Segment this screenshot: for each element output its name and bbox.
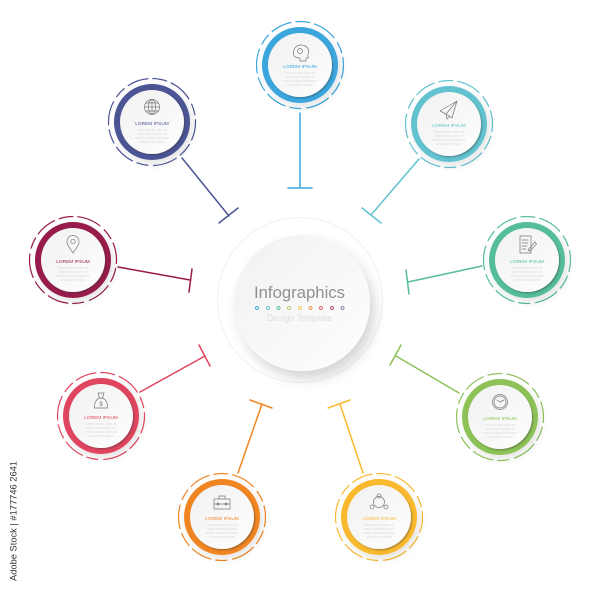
node: navy: [108, 78, 196, 166]
body text: Lorem ipsum dolor sit: [86, 422, 116, 426]
label: LOREM IPSUM: [135, 121, 169, 127]
icon: people cycle: [370, 494, 388, 509]
connector: red: [140, 345, 210, 392]
node: red: [58, 372, 144, 460]
body text: sed do eiusmod tempor: [362, 531, 397, 535]
node: sea green: [484, 216, 570, 304]
body text: amet consectetur elit: [86, 426, 116, 430]
connector: sea green: [406, 266, 482, 294]
body text: Lorem ipsum dolor sit: [285, 71, 315, 75]
body text: [205, 523, 240, 539]
body text: ut labore et dolore: [366, 535, 392, 539]
body text: sed do eiusmod tempor: [56, 274, 91, 278]
node: orange: [178, 474, 266, 560]
body text: [483, 423, 518, 439]
icon: paper plane: [440, 101, 457, 119]
label: LOREM IPSUM: [283, 64, 317, 70]
body text: amet consectetur elit: [58, 270, 88, 274]
hub subtitle: Design Template: [267, 313, 332, 323]
label: LOREM IPSUM: [205, 516, 239, 522]
body text: Lorem ipsum dolor sit: [364, 523, 394, 527]
hub title: Infographics: [254, 283, 345, 302]
hub colour dots: [256, 306, 344, 310]
node: crimson: [30, 216, 116, 304]
node: teal: [406, 80, 492, 168]
body text: amet consectetur elit: [434, 134, 464, 138]
body text: ut labore et dolore: [209, 535, 235, 539]
body text: Lorem ipsum dolor sit: [434, 130, 464, 134]
icon: globe: [144, 100, 160, 114]
body text: Lorem ipsum dolor sit: [512, 266, 542, 270]
body text: ut labore et dolore: [436, 142, 462, 146]
body text: Lorem ipsum dolor sit: [137, 128, 167, 132]
connector: orange: [238, 400, 272, 473]
connector: crimson: [118, 267, 192, 292]
icon: document and pen: [520, 236, 536, 253]
icon: head: [293, 45, 309, 61]
body text: sed do eiusmod tempor: [283, 79, 318, 83]
label: LOREM IPSUM: [510, 259, 544, 265]
body text: [510, 266, 545, 282]
label: LOREM IPSUM: [362, 516, 396, 522]
connector: navy: [182, 158, 238, 223]
body text: amet consectetur elit: [207, 527, 237, 531]
connector: yellow: [328, 400, 363, 473]
icon: money bag: $: [99, 402, 103, 408]
body text: ut labore et dolore: [139, 140, 165, 144]
body text: sed do eiusmod tempor: [135, 136, 170, 140]
body text: [362, 523, 397, 539]
label: LOREM IPSUM: [483, 416, 517, 422]
body text: amet consectetur elit: [485, 427, 515, 431]
icon: clock: [492, 394, 508, 410]
body text: amet consectetur elit: [285, 75, 315, 79]
body text: sed do eiusmod tempor: [483, 431, 518, 435]
node: blue: [256, 22, 344, 108]
body text: [283, 71, 318, 87]
node: yellow: [336, 474, 422, 560]
connector: teal: [362, 159, 419, 223]
central hub: [218, 218, 382, 382]
connector: green: [390, 345, 459, 393]
body text: ut labore et dolore: [287, 83, 313, 87]
body text: Lorem ipsum dolor sit: [58, 266, 88, 270]
stock credit: Adobe Stock | #177746 2641: [8, 461, 18, 581]
body text: ut labore et dolore: [487, 435, 513, 439]
icon: map pin: [67, 236, 79, 253]
connector: blue: [288, 113, 312, 188]
body text: sed do eiusmod tempor: [432, 138, 467, 142]
body text: Lorem ipsum dolor sit: [485, 423, 515, 427]
body text: [84, 422, 119, 438]
body text: sed do eiusmod tempor: [84, 430, 119, 434]
body text: sed do eiusmod tempor: [510, 274, 545, 278]
label: LOREM IPSUM: [84, 415, 118, 421]
body text: amet consectetur elit: [137, 132, 167, 136]
body text: amet consectetur elit: [512, 270, 542, 274]
body text: sed do eiusmod tempor: [205, 531, 240, 535]
body text: Lorem ipsum dolor sit: [207, 523, 237, 527]
label: LOREM IPSUM: [56, 259, 90, 265]
body text: ut labore et dolore: [88, 434, 114, 438]
body text: amet consectetur elit: [364, 527, 394, 531]
label: LOREM IPSUM: [432, 123, 466, 129]
body text: ut labore et dolore: [514, 278, 540, 282]
body text: ut labore et dolore: [60, 278, 86, 282]
body text: [135, 128, 170, 144]
icon: briefcase: [214, 496, 230, 509]
node: green: [456, 374, 544, 460]
body text: [56, 266, 91, 282]
body text: [432, 130, 467, 146]
